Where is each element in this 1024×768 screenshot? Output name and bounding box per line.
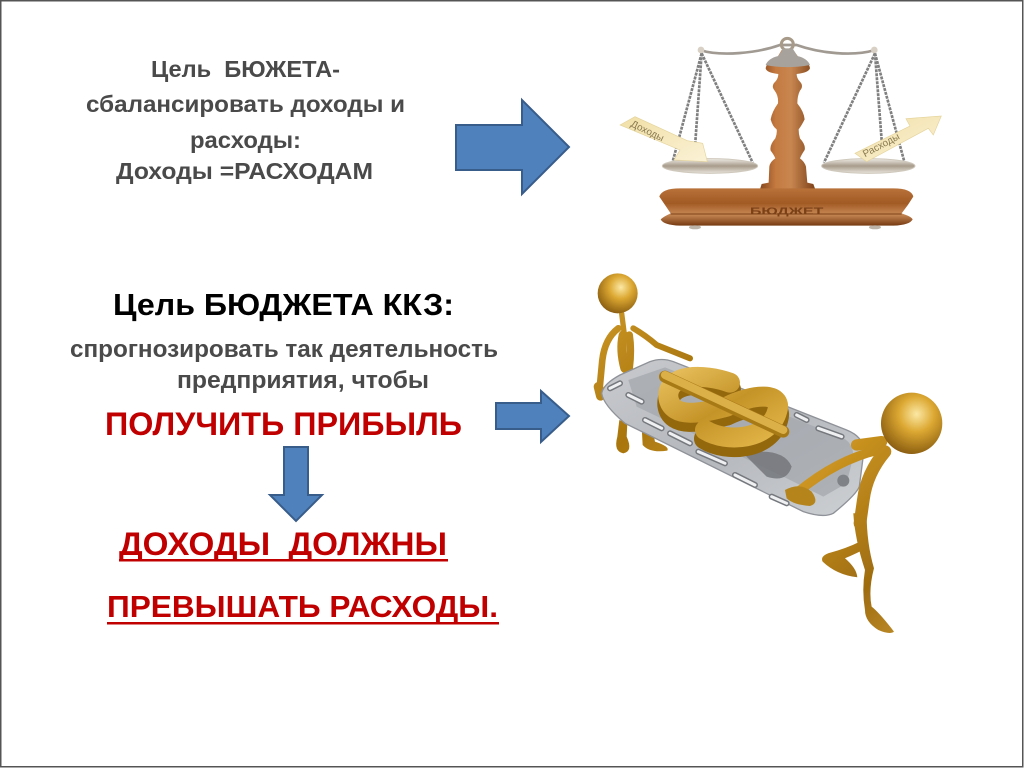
left chains: [673, 53, 753, 163]
column: [758, 50, 818, 197]
red text: income must: ДОХОДЫ ДОЛЖНЫ: [119, 526, 447, 562]
right expense arrow: Расходы: [861, 131, 902, 160]
column silver cap: [766, 48, 810, 67]
base: БЮДЖЕТ: [750, 206, 823, 217]
right figure hand: [785, 486, 815, 506]
left income arrow: Доходы: [629, 119, 665, 144]
text block: budget goal: Цель БЮЖЕТА-: [151, 56, 340, 82]
arrow: down: [270, 447, 322, 521]
stretcher: [602, 359, 864, 515]
right pan: [822, 159, 915, 173]
left figure head: [598, 273, 638, 313]
base: [659, 188, 913, 229]
text block: forecast: спрогнозировать так деятельность: [70, 336, 498, 363]
left figure body: [598, 313, 690, 396]
left figure legs: [616, 420, 668, 453]
left pan: [662, 159, 758, 173]
dollar sign: [665, 375, 783, 446]
text block: budget goal: Доходы =РАСХОДАМ: [116, 158, 373, 184]
illustration: budget scales: [620, 38, 941, 229]
scale beam: [698, 38, 878, 54]
arrow: to scales: [456, 100, 569, 194]
stretcher slots: [610, 383, 842, 503]
text block: budget goal: [86, 56, 405, 184]
right figure legs: [822, 513, 894, 633]
right expense arrow: [855, 116, 941, 162]
right chains: [824, 53, 905, 164]
red text: exceed expenses: ПРЕВЫШАТЬ РАСХОДЫ.: [107, 589, 498, 624]
text block: forecast: [70, 336, 498, 394]
text block: budget goal: сбалансировать доходы и: [86, 91, 405, 117]
illustration: gold figures carrying dollar on stretcher: [598, 273, 942, 633]
left income arrow: [620, 117, 707, 162]
text block: forecast: предприятия, чтобы: [177, 367, 429, 394]
right figure head: [881, 393, 942, 454]
red heading: make a profit: ПОЛУЧИТЬ ПРИБЫЛЬ: [105, 406, 462, 442]
text block: budget goal: расходы:: [190, 127, 301, 153]
heading: KKZ budget goal: Цель БЮДЖЕТА ККЗ:: [113, 287, 454, 322]
arrow: to stretcher: [496, 391, 569, 442]
right figure body: [798, 442, 885, 523]
